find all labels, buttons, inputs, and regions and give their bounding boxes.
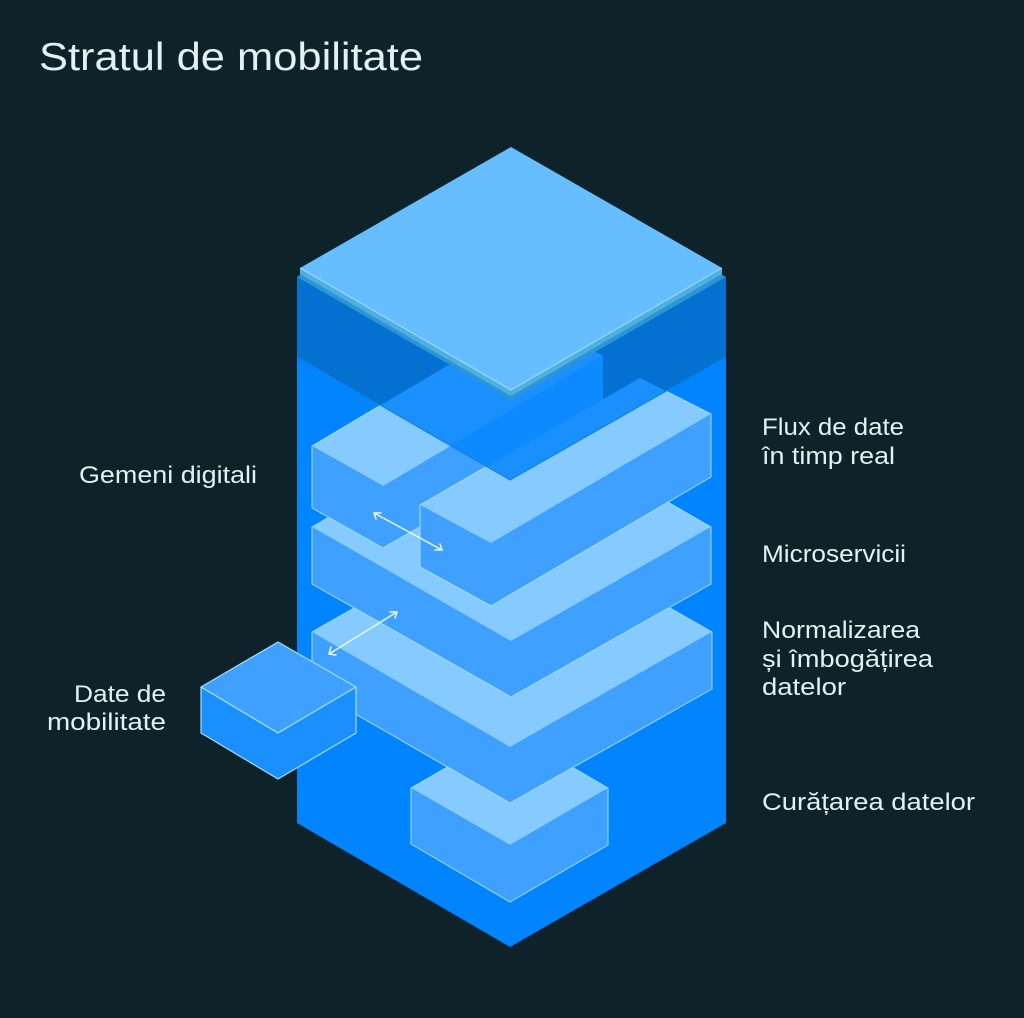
layer: data cleaning bbox=[411, 731, 608, 902]
label: normalization and enrichment: Normalizarea bbox=[762, 617, 921, 644]
label: data cleaning: Curățarea datelor bbox=[762, 789, 975, 816]
label: normalization and enrichment: datelor bbox=[762, 674, 846, 701]
label: normalization and enrichment: și îmbogățirea bbox=[762, 646, 934, 673]
layer: microservices bbox=[312, 412, 711, 697]
label: microservices: Microservicii bbox=[762, 541, 906, 568]
title: Stratul de mobilitate bbox=[39, 36, 423, 79]
box: real-time data stream bbox=[420, 378, 711, 606]
label: real-time data stream bbox=[761, 414, 904, 470]
top plate bbox=[297, 147, 726, 400]
label: normalization and enrichment bbox=[762, 617, 934, 701]
label: mobility data: Date de bbox=[74, 681, 166, 708]
arrow: digital twins to stream bbox=[374, 513, 442, 550]
label: digital twins: Gemeni digitali bbox=[79, 462, 257, 489]
tower body bbox=[297, 277, 726, 947]
arrow: mobility data to normalization bbox=[329, 612, 397, 655]
cube: mobility data bbox=[201, 642, 356, 779]
label: mobility data: mobilitate bbox=[47, 709, 166, 736]
layer: normalization and enrichment bbox=[312, 518, 712, 803]
dark band bbox=[296, 277, 726, 480]
label: real-time data stream: Flux de date bbox=[762, 414, 904, 441]
box: digital twins bbox=[312, 316, 603, 548]
label: real-time data stream: în timp real bbox=[761, 443, 895, 470]
label: mobility data bbox=[47, 681, 166, 736]
